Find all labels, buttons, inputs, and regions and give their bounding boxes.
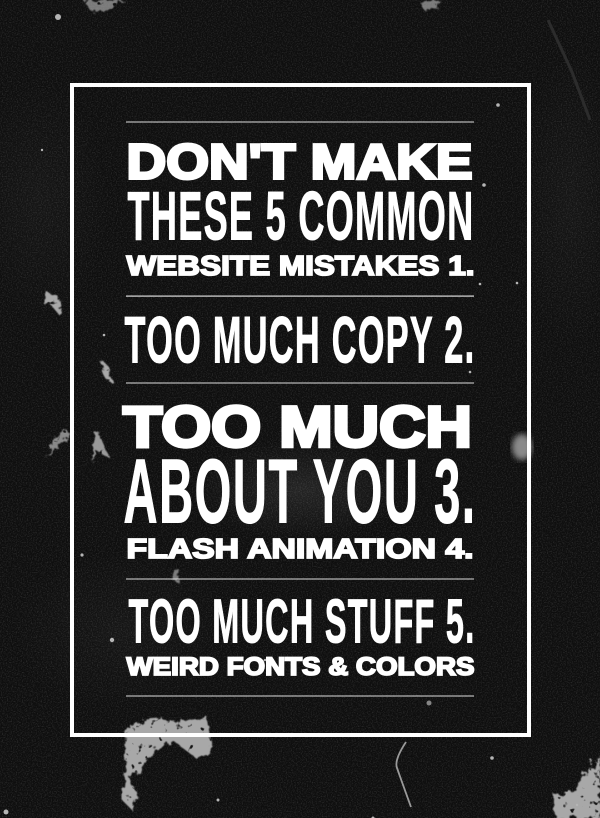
divider rule 4 bbox=[126, 578, 474, 580]
divider rule 1 bbox=[126, 122, 474, 123]
divider rule 5 bbox=[126, 696, 474, 697]
item: too much: TOO MUCH bbox=[123, 396, 472, 460]
item: flash animation 4.: FLASH ANIMATION 4. bbox=[126, 533, 474, 564]
item: weird fonts & colors: WEIRD FONTS & COLORS bbox=[126, 653, 475, 681]
divider rule 3 bbox=[126, 382, 474, 384]
heading: don't make: DON'T MAKE bbox=[126, 134, 472, 190]
divider rule 2 bbox=[126, 296, 474, 297]
white border frame bbox=[72, 85, 529, 735]
heading: website mistakes 1.: WEBSITE MISTAKES 1. bbox=[126, 250, 474, 281]
